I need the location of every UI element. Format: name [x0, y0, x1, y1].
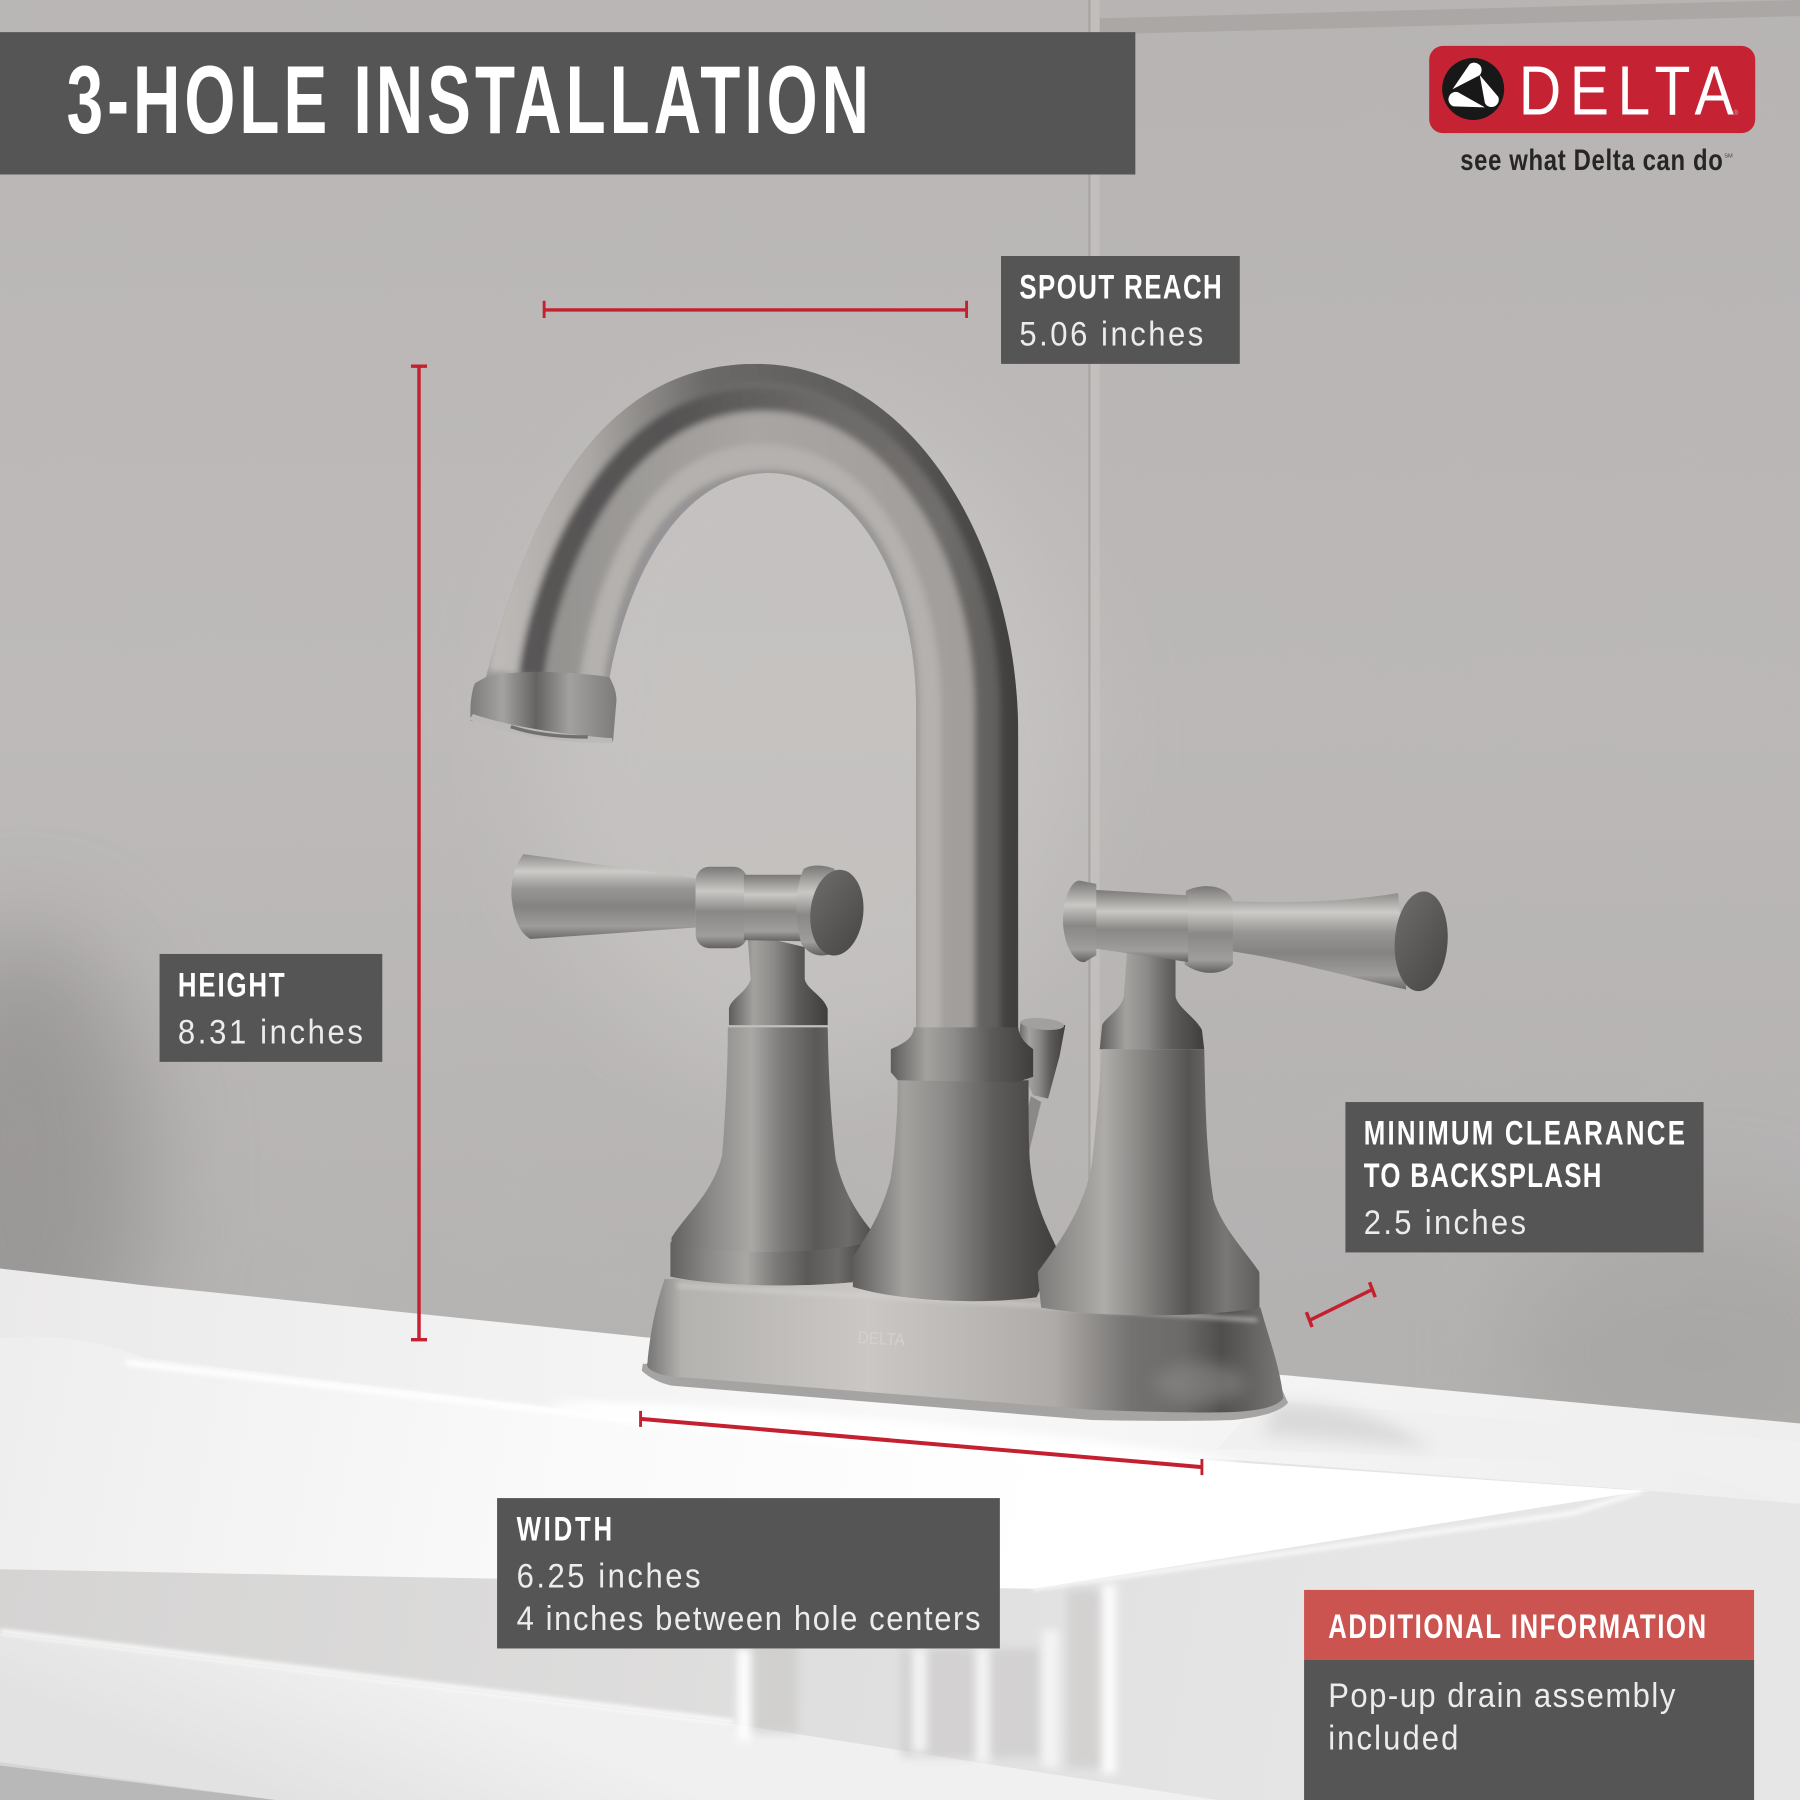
callout: width: WIDTH	[517, 1510, 612, 1548]
panel: additional information: included	[1328, 1718, 1458, 1757]
spout nozzle	[470, 672, 616, 742]
left stem and body	[670, 933, 872, 1285]
right stem and body	[1038, 948, 1259, 1315]
dimension line: width	[641, 1411, 1202, 1475]
panel: additional information: Pop-up drain assembly	[1328, 1675, 1676, 1714]
faucet deck plate	[642, 1279, 1288, 1421]
Delta logo: SM	[1724, 153, 1733, 159]
left lever handle	[511, 854, 868, 958]
center body and lift rod	[853, 1016, 1065, 1301]
callout: height	[160, 954, 382, 1062]
dimension line: spout reach	[544, 301, 967, 318]
callout: width: 6.25 inches	[517, 1556, 700, 1595]
plate logo: DELTA	[857, 1327, 906, 1350]
right lever handle	[1063, 880, 1451, 993]
callout: minimum clearance	[1345, 1102, 1704, 1252]
callout: minimum clearance: TO BACKSPLASH	[1364, 1156, 1601, 1195]
callout: minimum clearance: MINIMUM CLEARANCE	[1364, 1114, 1685, 1152]
faucet	[470, 356, 1451, 1421]
title bar: 3-HOLE INSTALLATION	[67, 47, 869, 154]
Delta logo	[1429, 46, 1755, 177]
callout: width: 4 inches between hole centers	[517, 1599, 980, 1637]
right handle cap	[1391, 890, 1451, 993]
title bar	[0, 32, 1135, 174]
panel: additional information	[1304, 1590, 1754, 1800]
Delta logo: DELTA	[1519, 50, 1734, 129]
callout: width	[497, 1498, 1000, 1648]
callout: height: 8.31 inches	[178, 1012, 363, 1051]
callout: spout reach: 5.06 inches	[1019, 314, 1203, 353]
callout: spout reach	[1001, 256, 1240, 364]
Delta logo: see what Delta can do	[1460, 143, 1723, 177]
callout: height: HEIGHT	[178, 966, 285, 1004]
dimension line: height	[411, 365, 427, 1341]
left handle cap	[806, 867, 868, 958]
panel: additional information: ADDITIONAL INFORMATION	[1328, 1608, 1706, 1646]
icon: delta triangle mark	[1442, 58, 1504, 120]
spout arc	[470, 356, 1033, 1068]
callout: spout reach: SPOUT REACH	[1019, 268, 1222, 306]
Delta logo: ®	[1733, 109, 1738, 117]
dimension line: clearance	[1306, 1282, 1375, 1327]
sink basin	[0, 1268, 1800, 1800]
callout: minimum clearance: 2.5 inches	[1364, 1203, 1526, 1241]
